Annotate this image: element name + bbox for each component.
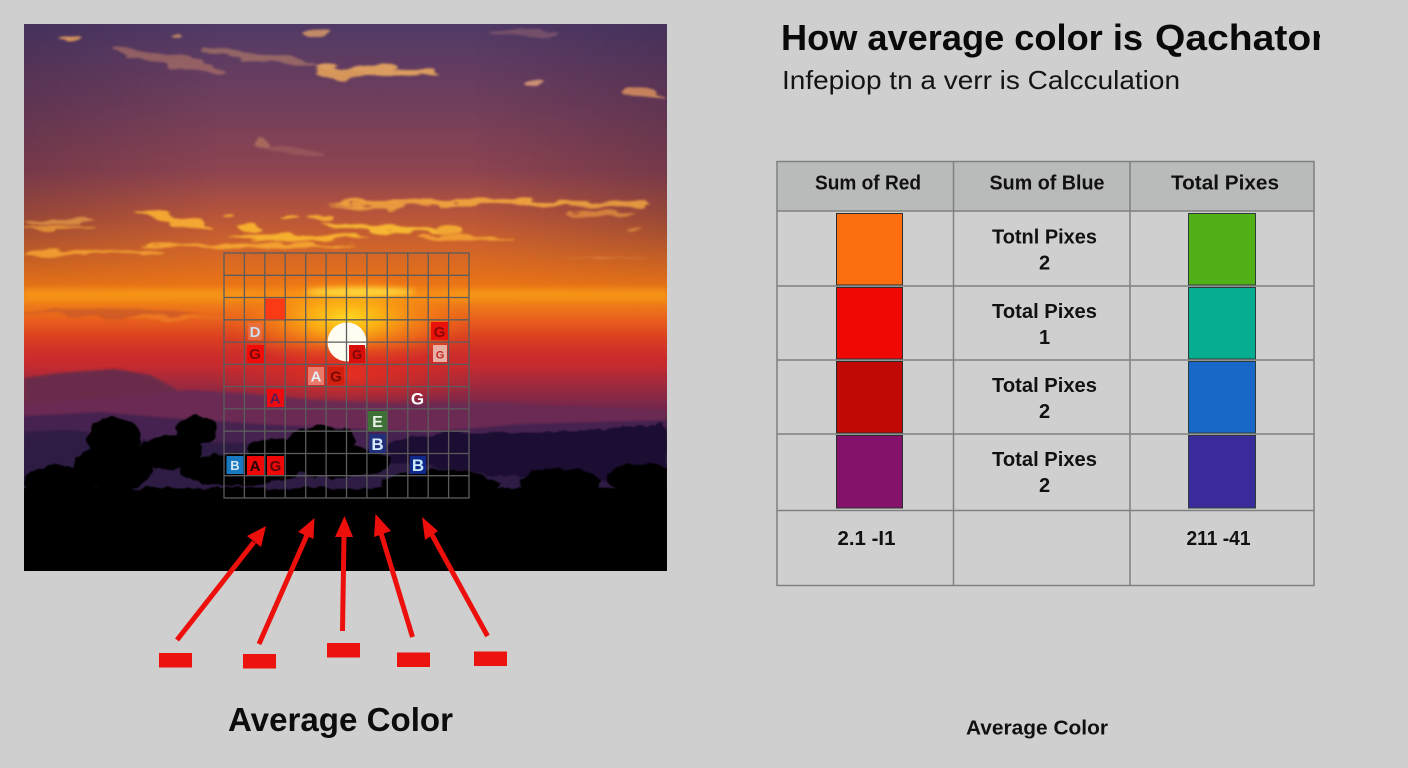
horizon glow <box>24 289 667 300</box>
middle column text: Totnl Pixes <box>992 226 1097 248</box>
middle column text: 2 <box>1039 252 1050 274</box>
table grid lines <box>777 162 1314 586</box>
red result bars <box>159 643 507 668</box>
pixel A black on red: A <box>250 458 261 475</box>
pixel light right: G <box>436 350 444 362</box>
middle column text: Total Pixes <box>992 375 1097 397</box>
header text: Total Pixes <box>1171 172 1279 194</box>
column 3 swatches <box>1188 214 1256 508</box>
highlighted pixel <box>266 298 285 320</box>
sun <box>328 322 366 362</box>
pixel G left <box>247 345 264 363</box>
table header background <box>777 162 1314 211</box>
upper clouds <box>58 29 667 158</box>
golden mid clouds <box>17 199 650 320</box>
pixel B blue: B <box>371 435 384 454</box>
pixel G black on red: G <box>270 458 281 475</box>
pixel G mid: G <box>330 368 342 386</box>
middle column text: Total Pixes <box>992 301 1097 323</box>
header text: Sum of Red <box>815 172 921 194</box>
arrow 3 <box>335 516 353 631</box>
header text <box>815 172 1279 194</box>
pixel E green <box>368 411 387 431</box>
pixel grid <box>224 253 469 498</box>
pixel E green: E <box>372 414 383 431</box>
arrows <box>177 514 488 644</box>
arrow 2 <box>259 518 314 644</box>
middle column text: Total Pixes <box>992 449 1097 471</box>
column 1 swatches <box>836 214 902 508</box>
pixel G black on red <box>267 456 284 475</box>
pixel D: D <box>250 324 261 341</box>
arrow 5 <box>422 517 488 636</box>
label: average color right: Average Color <box>966 718 1108 740</box>
pixel A pale <box>308 367 324 386</box>
pixel blue icon: B <box>230 458 240 473</box>
title <box>783 24 1320 58</box>
middle column text: 1 <box>1039 327 1050 349</box>
bottom row values: 211 -41 <box>1186 528 1250 550</box>
bottom row values: 2.1 -I1 <box>838 528 896 550</box>
title: How average color is <box>781 17 1143 58</box>
pixel G top right: G <box>434 324 445 341</box>
pixel blue icon <box>226 456 244 474</box>
distant mountains <box>24 369 667 490</box>
middle column text: 2 <box>1039 401 1050 423</box>
pixel over sun <box>349 345 365 363</box>
table <box>777 162 1314 586</box>
pixel light right <box>433 345 447 362</box>
label: average color left: Average Color <box>228 701 453 738</box>
middle column text: 2 <box>1039 475 1050 497</box>
pixel labels on grid <box>226 298 448 475</box>
pixel A black on red <box>247 456 264 475</box>
pixel B blue <box>369 434 386 454</box>
pixel over sun: G <box>352 347 362 362</box>
pixel A pale: A <box>311 368 322 386</box>
panel: sunset photo <box>10 24 680 588</box>
title: Qachaton <box>1155 17 1335 58</box>
subtitle: Infepiop tn a verr is Calcculation <box>782 65 1180 95</box>
tree silhouettes <box>24 414 667 540</box>
pixel G mid <box>328 367 344 386</box>
bottom row values <box>838 528 1250 550</box>
arrow 4 <box>374 514 412 637</box>
header text: Sum of Blue <box>990 172 1104 194</box>
pixel B blue right: B <box>412 456 424 475</box>
arrow 1 <box>177 526 266 640</box>
middle column text <box>992 226 1097 497</box>
pixel A red <box>267 389 284 408</box>
pixel G left: G <box>249 346 261 363</box>
pixel G top right <box>431 322 448 341</box>
pixel A red: A <box>270 390 281 408</box>
pixel G white: G <box>411 390 424 408</box>
